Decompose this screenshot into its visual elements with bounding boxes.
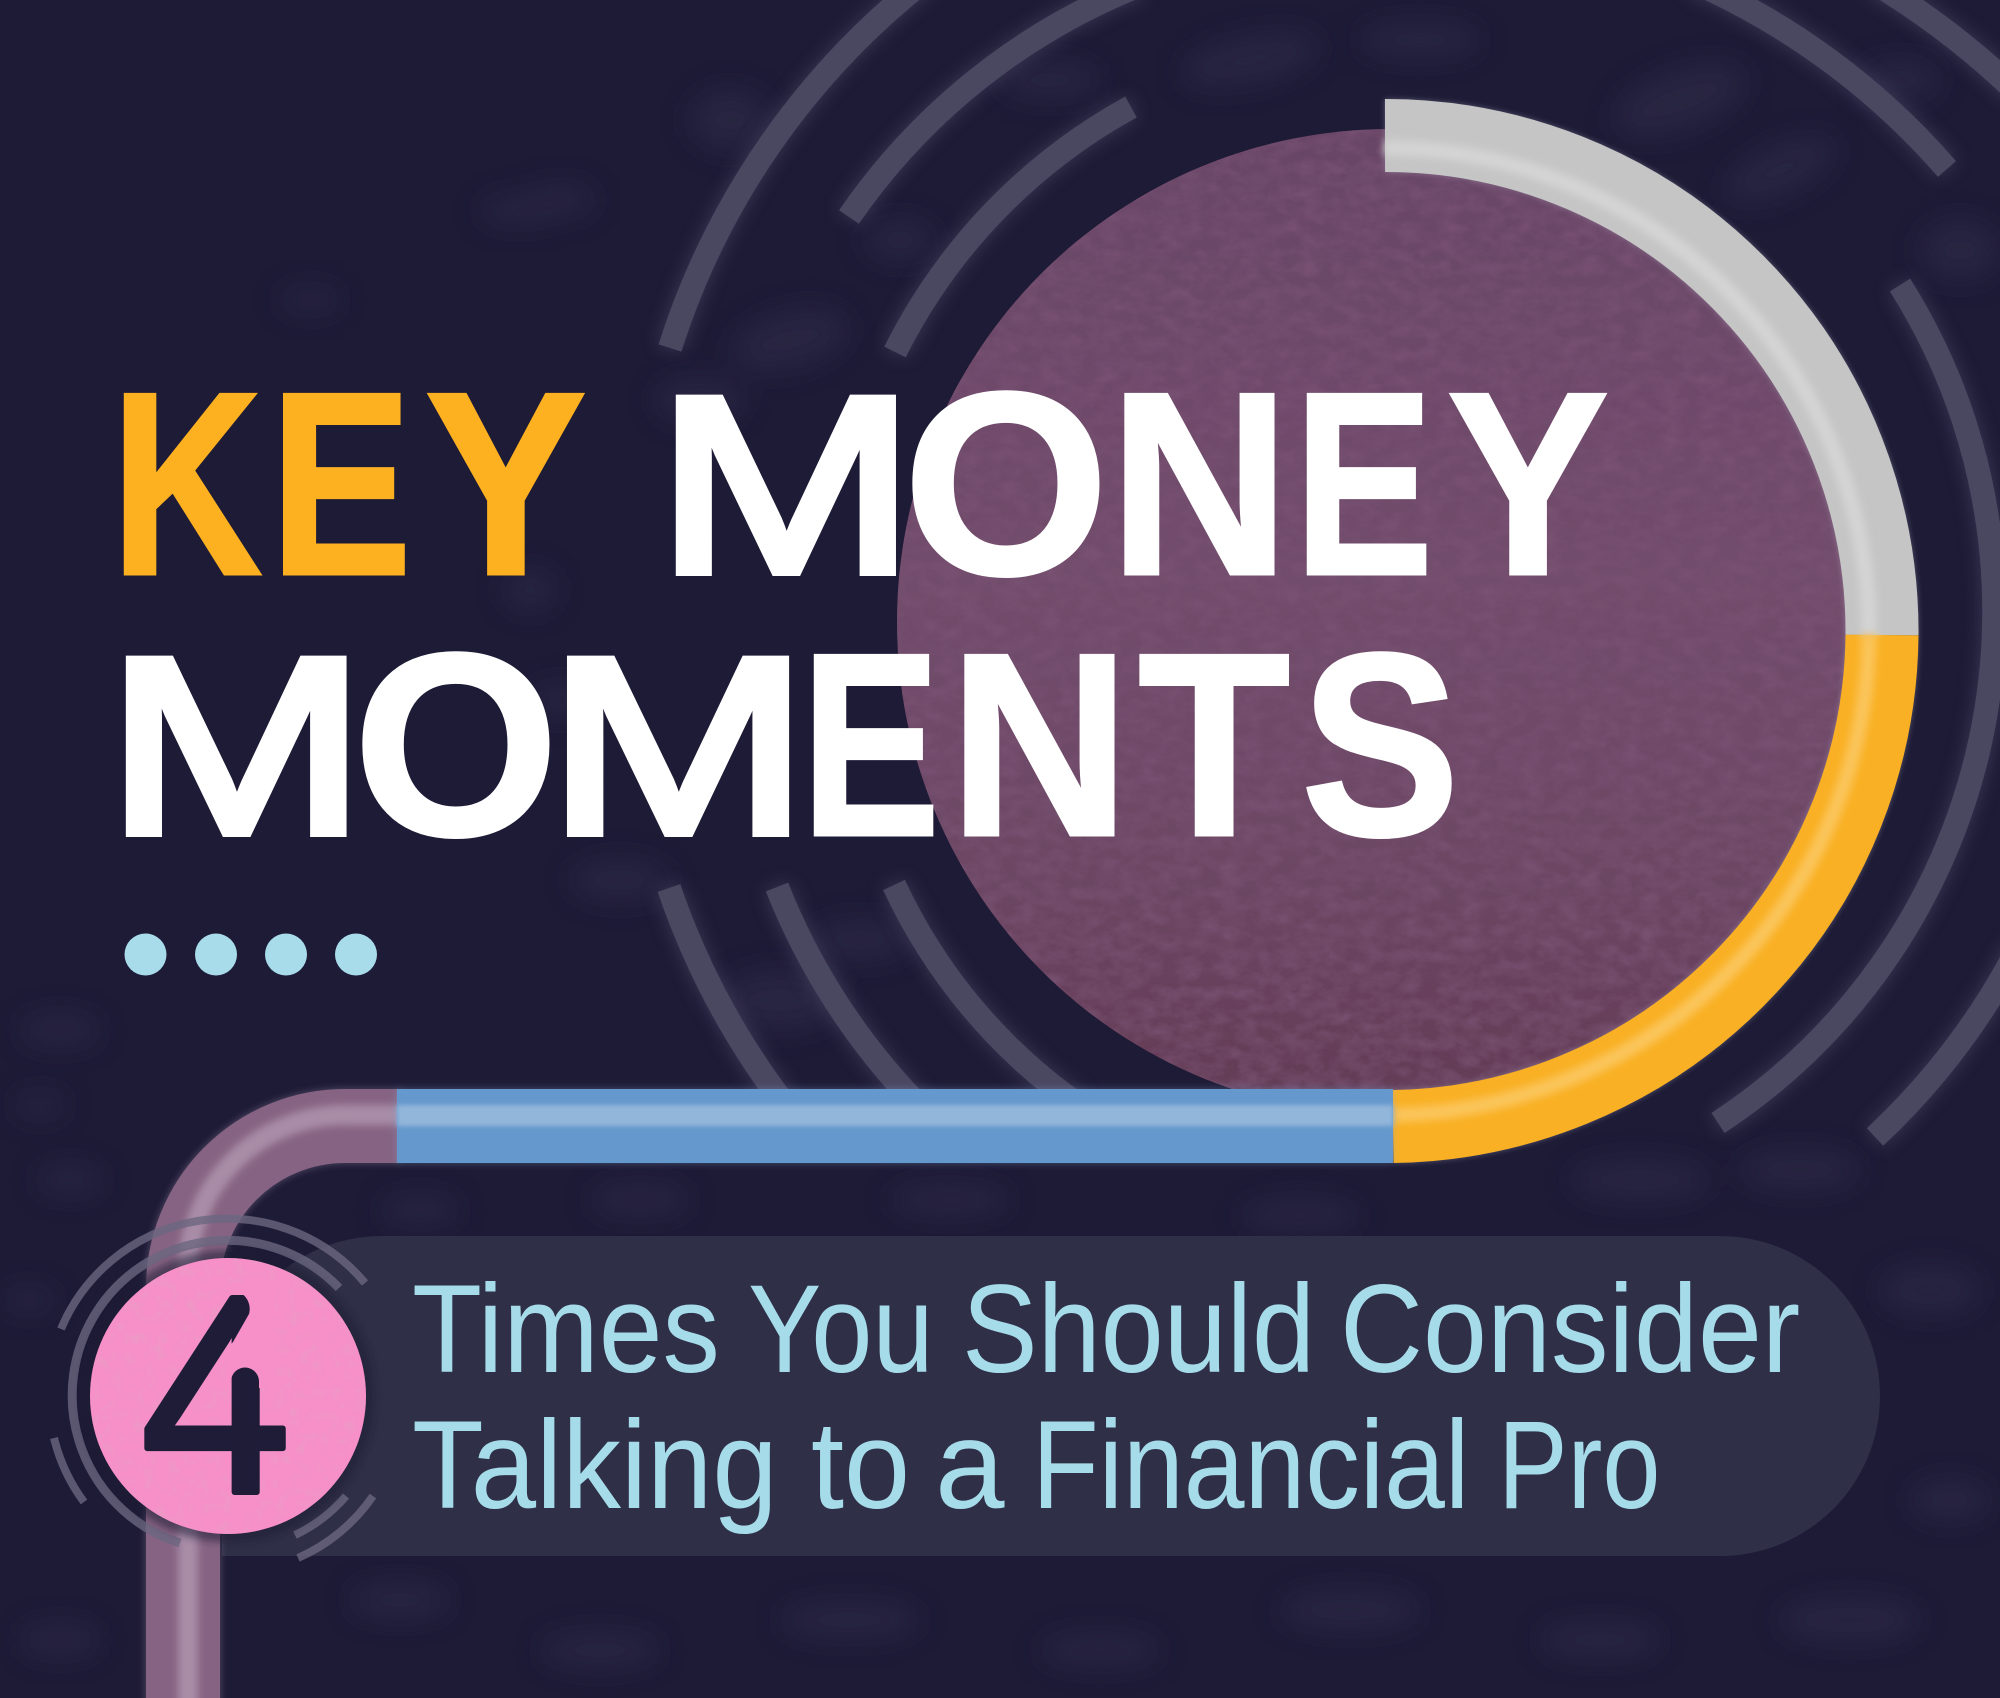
title: T	[1138, 600, 1290, 891]
subtitle: to	[811, 1396, 910, 1535]
title: E	[1294, 339, 1433, 630]
subtitle: Financial	[1032, 1396, 1469, 1535]
subtitle: Talking	[412, 1396, 778, 1535]
ring highlight: yellow	[1393, 635, 1869, 1115]
title: M	[105, 606, 367, 887]
title: E	[801, 600, 940, 891]
badge number 4: 4	[141, 1237, 291, 1552]
title: N	[1109, 339, 1290, 630]
subtitle pill panel	[222, 1236, 1880, 1556]
blue bar highlight	[397, 1105, 1393, 1126]
arc: outer lower left	[669, 888, 785, 1105]
tube body	[183, 1126, 400, 1698]
number badge	[54, 1219, 374, 1558]
subtitle: a	[935, 1396, 1005, 1535]
arc: right side	[1718, 285, 1994, 1123]
large plum circle	[897, 129, 1883, 1115]
title: O	[353, 600, 559, 891]
arc: middle lower left	[777, 887, 918, 1105]
title: E	[270, 339, 412, 630]
arc: far lower right	[1875, 945, 2000, 1137]
pink badge circle	[90, 1258, 366, 1534]
blue bar	[397, 1089, 1393, 1163]
ring: inner sweep	[72, 1240, 339, 1543]
arc: inner lower left	[894, 885, 1078, 1105]
ring: outer top	[61, 1219, 365, 1329]
arc: top right	[1690, 0, 1947, 169]
ring: lower right outer	[298, 1496, 373, 1558]
progress ring	[1385, 135, 1882, 1126]
arc: outer upper left	[670, 0, 925, 348]
subtitle	[412, 1260, 1800, 1535]
title: Y	[1447, 339, 1609, 630]
arc: inner upper left	[895, 107, 1131, 352]
subtitle: Pro	[1498, 1396, 1660, 1535]
title: Y	[425, 339, 587, 630]
subtitle: You	[748, 1260, 934, 1399]
ring segment: gray	[1385, 135, 1882, 635]
mauve tube	[183, 1115, 400, 1698]
ring highlight: gray	[1385, 148, 1869, 635]
arc: far top right	[1870, 0, 2000, 95]
ring segment: yellow	[1393, 635, 1882, 1126]
tube highlight	[188, 1115, 400, 1698]
arc: middle upper left	[849, 0, 1140, 217]
decorative radar arcs around the large circle	[669, 0, 2000, 1137]
title: N	[949, 600, 1130, 891]
badge rings	[54, 1219, 373, 1558]
title: O	[902, 339, 1109, 630]
ring: lower right inner	[295, 1496, 346, 1535]
title	[105, 66, 1970, 1163]
title: M	[655, 345, 917, 626]
title: M	[546, 606, 810, 887]
badge number opening: pink patch that opens the top of the 4	[226, 1282, 275, 1388]
four dots	[124, 934, 377, 976]
subtitle: Should	[962, 1260, 1315, 1399]
blue tube	[397, 1089, 1393, 1163]
ring: lower left	[54, 1438, 84, 1502]
title: S	[1301, 600, 1460, 891]
badge circle shadow	[82, 1250, 374, 1542]
subtitle: Times	[412, 1260, 720, 1399]
title: K	[111, 339, 262, 630]
subtitle: Consider	[1340, 1260, 1800, 1399]
